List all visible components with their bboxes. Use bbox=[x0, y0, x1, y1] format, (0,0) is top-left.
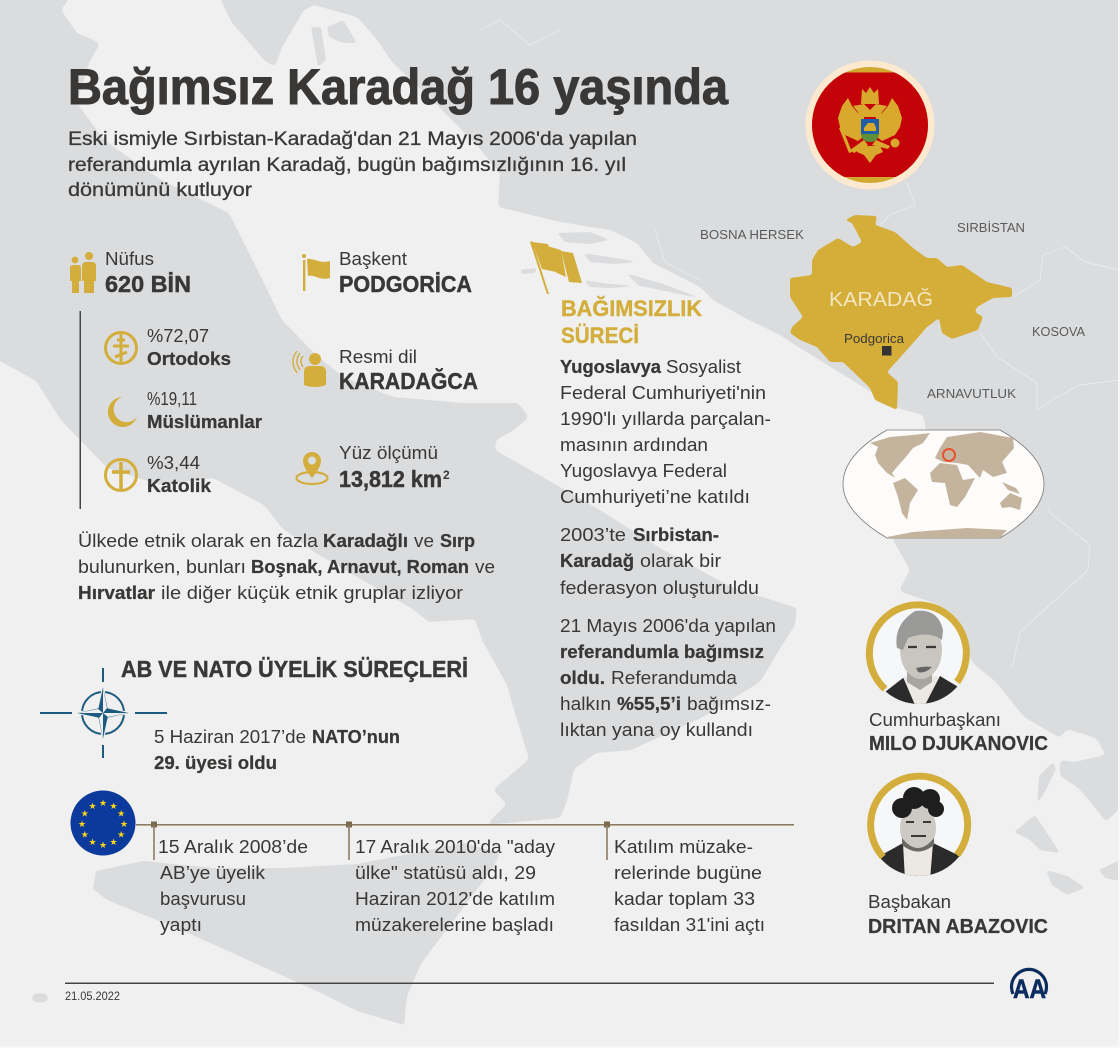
ethnic groups paragraph: Karadağlı bbox=[323, 531, 408, 551]
caption: president bbox=[869, 710, 1048, 755]
stat: muslims: %19,11 bbox=[147, 389, 197, 409]
stat: language: Resmi dil bbox=[339, 347, 417, 367]
title: Bağımsız Karadağ 16 yaşında bbox=[68, 59, 729, 115]
independence text 2: federasyon oluşturuldu bbox=[560, 578, 759, 598]
date: 21.05.2022 bbox=[65, 991, 120, 1003]
independence text 2: Karadağ bbox=[560, 551, 634, 571]
independence text 1: masının ardından bbox=[560, 435, 708, 455]
stat: muslims: Müslümanlar bbox=[147, 412, 262, 432]
independence text 3: lıktan yana oy kullandı bbox=[560, 720, 753, 740]
stat: catholics: %3,44 bbox=[147, 453, 200, 473]
heading: independence process: SÜRECİ bbox=[561, 323, 639, 348]
stat: language: KARADAĞCA bbox=[339, 367, 478, 394]
label: Bosna Hersek: BOSNA HERSEK bbox=[700, 227, 804, 242]
icon: EU flag: ★ bbox=[88, 837, 97, 847]
stat: orthodox: Ortodoks bbox=[147, 349, 231, 369]
independence text 2: olarak bir bbox=[640, 551, 721, 571]
icon: EU flag: ★ bbox=[99, 798, 107, 808]
independence text 2 bbox=[560, 525, 759, 598]
subtitle: Eski ismiyle Sırbistan-Karadağ'dan 21 Mayıs 2006'da yapılan bbox=[68, 129, 637, 150]
ethnic groups paragraph: Sırp bbox=[440, 531, 475, 551]
independence text 1 bbox=[560, 357, 771, 507]
caption: president: Cumhurbaşkanı bbox=[869, 710, 1001, 730]
subtitle: dönümünü kutluyor bbox=[68, 180, 253, 201]
subtitle bbox=[68, 129, 637, 201]
footer rule bbox=[65, 982, 994, 984]
independence text 3: oldu. bbox=[560, 668, 605, 688]
timeline item 1 bbox=[158, 837, 308, 935]
NATO text: 29. üyesi oldu bbox=[154, 753, 277, 773]
independence text 3: referandumla bağımsız bbox=[560, 642, 764, 662]
timeline item 1: 15 Aralık 2008’de bbox=[158, 837, 308, 857]
independence text 1: Sosyalist bbox=[666, 357, 741, 377]
capital marker bbox=[882, 346, 892, 356]
independence text 1: Cumhuriyeti’ne katıldı bbox=[560, 487, 750, 507]
stat: area bbox=[339, 443, 450, 492]
icon: NATO compass bbox=[40, 668, 167, 758]
ethnic groups paragraph bbox=[78, 531, 495, 603]
timeline item 3 bbox=[614, 837, 765, 935]
independence text 3: %55,5’i bbox=[617, 694, 681, 714]
ethnic groups paragraph: bulunurken, bunları bbox=[78, 557, 246, 577]
label: Sırbistan: SIRBİSTAN bbox=[957, 220, 1025, 235]
icon: crescent bbox=[108, 397, 137, 427]
timeline item 3: kadar toplam 33 bbox=[614, 889, 755, 909]
ethnic groups paragraph: Boşnak, Arnavut, Roman bbox=[251, 557, 469, 577]
icon: Montenegro flag bbox=[806, 60, 934, 190]
stat: population: Nüfus bbox=[105, 249, 154, 269]
independence text 2: 2003’te bbox=[560, 525, 626, 545]
icon: EU flag: ★ bbox=[109, 801, 118, 811]
NATO text: NATO’nun bbox=[312, 727, 400, 747]
icon: location pin bbox=[296, 452, 328, 484]
icon: EU flag: ★ bbox=[120, 819, 128, 829]
religion divider line bbox=[80, 311, 81, 509]
stat: capital: Başkent bbox=[339, 249, 407, 269]
independence text 1: 1990'lı yıllarda parçalan- bbox=[560, 409, 771, 429]
heading: independence process bbox=[561, 296, 702, 348]
stat: language bbox=[339, 347, 478, 394]
caption: prime minister: Başbakan bbox=[868, 892, 951, 912]
independence text 3: Referandumda bbox=[611, 668, 738, 688]
timeline item 1: başvurusu bbox=[160, 889, 246, 909]
heading: EU and NATO: AB VE NATO ÜYELİK SÜREÇLERİ bbox=[121, 656, 468, 682]
ethnic groups paragraph: Ülkede etnik olarak en fazla bbox=[78, 531, 319, 551]
stat: orthodox bbox=[147, 326, 231, 369]
portrait: Milo Djukanovic bbox=[869, 605, 966, 710]
stat: muslims bbox=[147, 389, 262, 432]
icon: EU flag: ★ bbox=[81, 830, 89, 840]
independence text 1: Yugoslavya bbox=[560, 357, 662, 377]
icon: EU flag: ★ bbox=[109, 837, 118, 847]
timeline item 2: 17 Aralık 2010'da "aday bbox=[355, 837, 555, 857]
label: Kosova: KOSOVA bbox=[1032, 324, 1085, 339]
Montenegro map bbox=[790, 215, 1012, 410]
timeline item 1: AB’ye üyelik bbox=[160, 863, 266, 883]
stat: capital bbox=[339, 249, 472, 297]
timeline item 2 bbox=[355, 837, 555, 935]
independence text 3 bbox=[560, 616, 776, 740]
stat: population bbox=[105, 249, 191, 297]
stat: catholics bbox=[147, 453, 212, 496]
caption: prime minister bbox=[868, 892, 1048, 938]
caption: president: MILO DJUKANOVIC bbox=[869, 733, 1048, 755]
timeline bbox=[136, 822, 794, 860]
stat: population: 620 BİN bbox=[105, 271, 191, 297]
label: Podgorica: Podgorica bbox=[844, 331, 905, 346]
icon: EU flag: ★ bbox=[99, 840, 107, 850]
icon: orthodox cross bbox=[106, 332, 136, 364]
timeline item 3: Katılım müzake- bbox=[614, 837, 753, 857]
NATO text: 5 Haziran 2017’de bbox=[154, 727, 306, 747]
independence text 3: 21 Mayıs 2006'da yapılan bbox=[560, 616, 776, 636]
icon: EU flag: ★ bbox=[78, 819, 86, 829]
stat: catholics: Katolik bbox=[147, 476, 212, 496]
icon: EU flag bbox=[70, 790, 136, 856]
stat: capital: PODGORİCA bbox=[339, 271, 472, 297]
stat: area: Yüz ölçümü bbox=[339, 443, 438, 463]
locator world map bbox=[843, 430, 1044, 538]
ethnic groups paragraph: ve bbox=[414, 531, 434, 551]
independence text 1: Federal Cumhuriyeti'nin bbox=[560, 383, 766, 403]
icon: EU flag: ★ bbox=[81, 808, 89, 818]
timeline item 2: Haziran 2012'de katılım bbox=[355, 889, 555, 909]
label: Arnavutluk: ARNAVUTLUK bbox=[927, 386, 1016, 401]
icon: independence flag bbox=[530, 241, 582, 294]
portrait: Dritan Abazovic bbox=[870, 776, 968, 885]
icon: flag bbox=[302, 254, 330, 291]
icon: speaking person bbox=[293, 351, 326, 387]
timeline item 2: müzakerelerine başladı bbox=[355, 915, 554, 935]
icon: people bbox=[70, 252, 96, 293]
timeline item 3: relerinde bugüne bbox=[614, 863, 762, 883]
NATO text bbox=[154, 727, 400, 773]
label: Karadağ: KARADAĞ bbox=[829, 288, 933, 311]
icon: EU flag: ★ bbox=[117, 830, 125, 840]
ethnic groups paragraph: ile diğer küçük etnik gruplar izliyor bbox=[161, 583, 463, 603]
ethnic groups paragraph: ve bbox=[475, 557, 495, 577]
caption: prime minister: DRITAN ABAZOVIC bbox=[868, 916, 1048, 938]
logo: AA: AA bbox=[1013, 974, 1046, 1004]
heading: independence process: BAĞIMSIZLIK bbox=[561, 296, 702, 321]
icon: EU flag: ★ bbox=[117, 808, 125, 818]
subtitle: referandumla ayrılan Karadağ, bugün bağımsızlığının 16. yıl bbox=[68, 155, 626, 176]
timeline item 2: ülke" statüsü aldı, 29 bbox=[355, 863, 536, 883]
stat: orthodox: %72,07 bbox=[147, 326, 209, 346]
timeline item 1: yaptı bbox=[160, 915, 202, 935]
stat: area: 13,812 km bbox=[339, 466, 442, 492]
stat: area: 2 bbox=[443, 468, 450, 482]
independence text 1: Yugoslavya Federal bbox=[560, 461, 727, 481]
icon: EU flag: ★ bbox=[88, 801, 97, 811]
independence text 3: halkın bbox=[560, 694, 611, 714]
ethnic groups paragraph: Hırvatlar bbox=[78, 583, 155, 603]
independence text 3: bağımsız- bbox=[687, 694, 771, 714]
independence text 2: Sırbistan- bbox=[633, 525, 719, 545]
icon: catholic cross bbox=[106, 460, 136, 490]
timeline item 3: fasıldan 31'ini açtı bbox=[614, 915, 765, 935]
